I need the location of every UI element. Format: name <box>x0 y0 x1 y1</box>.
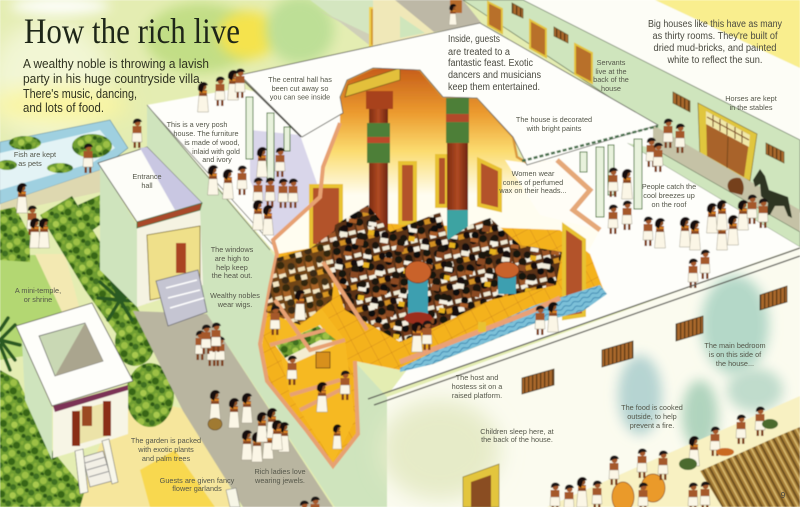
stable door <box>698 103 757 181</box>
water band <box>400 285 607 372</box>
caption: posh house: house. The furniture <box>173 129 239 138</box>
caption: entrance hall: hall <box>141 181 153 190</box>
people on left terrace <box>198 68 298 235</box>
caption: garden: with exotic plants <box>137 445 194 454</box>
caption: garlands: flower garlands <box>172 484 222 493</box>
caption: windows: are high to <box>215 254 249 263</box>
caption: servants: house <box>601 84 621 93</box>
text: big houses: white to reflect the sun. <box>667 55 762 66</box>
caption: wigs: Wealthy nobles <box>210 291 260 300</box>
shrine <box>16 303 133 494</box>
caption: fish: as pets <box>18 159 42 168</box>
caption: posh house: and ivory <box>202 155 232 164</box>
text: feast <box>448 34 541 93</box>
lawn and sunlit paths <box>0 254 240 507</box>
caption: garlands: Guests are given fancy <box>160 476 235 485</box>
caption: host: raised platform. <box>452 391 502 400</box>
text: big houses: as thirty rooms. They're built of <box>652 31 778 42</box>
cooks <box>550 406 765 507</box>
rear roof <box>523 0 800 140</box>
caption: breezes: on the roof <box>652 200 687 209</box>
text: feast: are treated to a <box>448 47 510 58</box>
caption: posh house: This is a very posh <box>167 120 227 129</box>
caption: fish: Fish are kept <box>14 150 56 159</box>
back wall with doors and windows <box>463 0 800 212</box>
caption: perfume: cones of perfumed <box>503 178 563 187</box>
people on right terrace <box>608 118 768 288</box>
caption: jewels: Rich ladies love <box>254 467 306 476</box>
text: feast: dancers and musicians <box>448 70 541 81</box>
people on the path <box>195 322 320 507</box>
caption: paints: The house is decorated <box>516 115 592 124</box>
caption: horses: in the stables <box>730 103 773 112</box>
top right yellow corner <box>655 0 800 68</box>
caption: food: The food is cooked <box>621 403 683 412</box>
front parapet <box>368 248 800 405</box>
caption: windows: the heat out. <box>212 271 252 280</box>
caption: children: the back of the house. <box>481 435 553 444</box>
hall doors <box>311 156 584 318</box>
caption: host: hostess sit on a <box>452 382 503 391</box>
caption: servants: live at the <box>595 67 627 76</box>
kitchen yard <box>547 396 800 507</box>
text: big houses: Big houses like this have as many <box>648 19 782 30</box>
text: feast: fantastic feast. Exotic <box>448 58 533 69</box>
people in the garden <box>16 118 142 248</box>
right roof terrace <box>390 125 800 392</box>
reed mat <box>700 427 800 507</box>
caption: servants: back of the <box>593 75 629 84</box>
caption: central hall: you can see inside <box>270 92 330 102</box>
caption: servants: Servants <box>597 58 626 67</box>
front wall <box>380 247 800 507</box>
side wall <box>147 105 388 507</box>
door <box>463 464 499 507</box>
caption: breezes: cool breezes up <box>643 191 695 200</box>
steps <box>156 270 207 326</box>
caption: central hall: been cut away so <box>272 84 328 93</box>
lower side rooms <box>266 228 367 462</box>
caption: shrine: A mini-temple, <box>15 286 61 295</box>
back left building <box>310 0 482 48</box>
caption: breezes: People catch the <box>642 182 696 191</box>
caption: perfume: wax on their heads... <box>498 186 567 195</box>
intro text: There's music, dancing, <box>23 87 137 101</box>
caption: bedroom: The main bedroom <box>704 341 766 350</box>
title: How the rich live <box>24 11 240 51</box>
palm tree <box>0 262 146 370</box>
text: big houses <box>648 19 782 66</box>
caption: shrine: or shrine <box>24 295 52 304</box>
pool <box>0 120 128 215</box>
text: big houses: dried mud-bricks, and painted <box>654 43 776 54</box>
left roof terrace <box>147 88 345 253</box>
intro text <box>23 57 209 115</box>
caption: food: outside, to help <box>627 412 677 421</box>
caption: central hall: The central hall has <box>268 75 332 84</box>
caption: posh house: is made of wood, <box>184 138 240 147</box>
caption: wigs: wear wigs. <box>217 300 252 309</box>
door <box>488 2 592 83</box>
caption: entrance hall: Entrance <box>132 172 162 181</box>
caption: perfume: Women wear <box>512 169 555 178</box>
caption: children: Children sleep here, at <box>480 427 554 436</box>
main roof <box>240 23 658 165</box>
feast crowd <box>330 205 562 342</box>
right terrace pillars <box>580 139 642 217</box>
caption: food: prevent a fire. <box>630 421 674 430</box>
caption: posh house: inlaid with gold <box>192 147 240 156</box>
entrance hall <box>98 147 207 326</box>
horses <box>728 169 792 218</box>
flower basket <box>208 418 222 430</box>
short columns <box>404 261 519 324</box>
pool plants <box>0 134 112 173</box>
stable yard and low wall <box>627 125 800 247</box>
text: feast: Inside, guests <box>448 34 500 45</box>
hall interior <box>260 66 607 466</box>
caption: bedroom: is on this side of <box>709 350 762 359</box>
ovens <box>612 474 665 507</box>
caption: bedroom: the house... <box>716 359 754 368</box>
page number: 9 <box>781 491 786 500</box>
text: feast: keep them entertained. <box>448 82 540 93</box>
path pillar <box>226 488 240 507</box>
big columns <box>366 91 469 272</box>
windows <box>512 3 784 163</box>
left terrace pillars <box>246 97 290 181</box>
intro text: and lots of food. <box>23 101 104 115</box>
caption: garden: The garden is packed <box>131 436 201 445</box>
intro text: A wealthy noble is throwing a lavish <box>23 57 209 71</box>
windows <box>522 286 787 394</box>
cut edge <box>340 66 527 163</box>
caption: jewels: wearing jewels. <box>254 476 305 485</box>
caption: horses: Horses are kept <box>725 94 777 103</box>
caption: host: The host and <box>456 373 498 382</box>
intro text: party in his huge countryside villa. <box>23 72 203 86</box>
caption: paints: with bright paints <box>526 124 582 133</box>
garden bushes <box>0 195 174 507</box>
caption: garden: and palm trees <box>142 454 190 463</box>
path <box>133 311 333 507</box>
caption: windows: help keep <box>216 263 248 272</box>
caption: windows: The windows <box>211 245 254 254</box>
host and hostess <box>412 302 558 352</box>
